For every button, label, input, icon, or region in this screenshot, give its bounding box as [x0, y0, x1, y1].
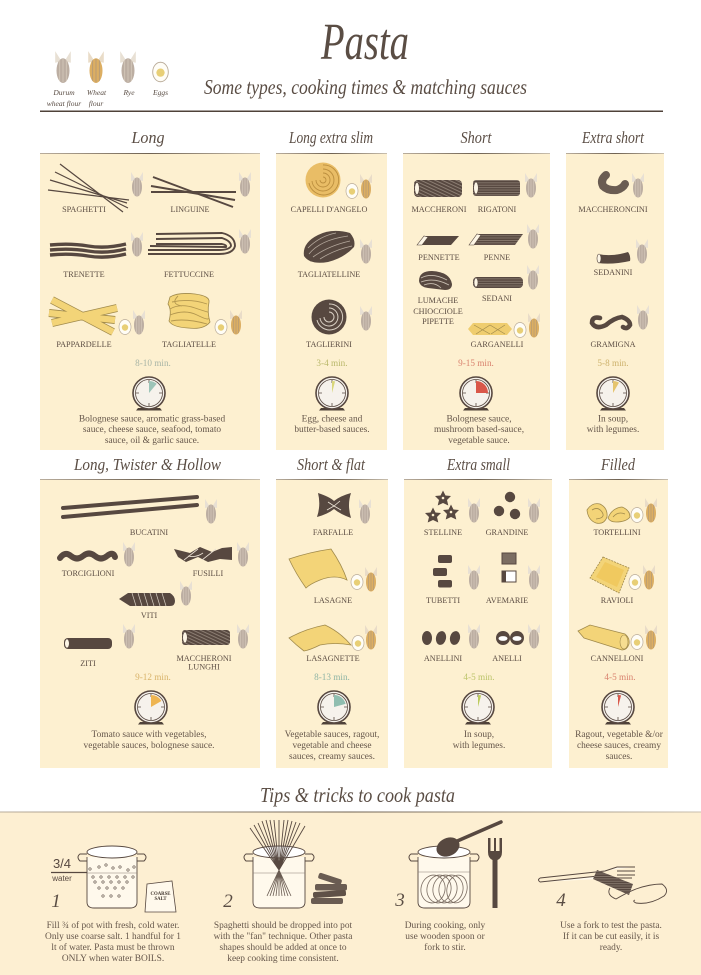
- avemarie: [486, 553, 540, 605]
- panel: Long: [40, 128, 260, 450]
- sauces: Vegetable sauces, ragout,: [285, 730, 379, 740]
- lasagne: LASAGNE: [314, 596, 352, 605]
- step text: fork to stir.: [424, 942, 466, 953]
- tagliatelline: [298, 231, 372, 279]
- fusilli: FUSILLI: [193, 569, 224, 578]
- linguine: [151, 172, 251, 214]
- pappardelle: [49, 300, 145, 349]
- timer: [602, 691, 634, 724]
- trenette: TRENETTE: [63, 270, 105, 279]
- cooking time: 4-5 min.: [463, 672, 495, 682]
- maccheroncini: [578, 173, 648, 214]
- ziti: [64, 624, 135, 668]
- number 1: 1: [51, 891, 61, 912]
- icon: salt box: SALT: [154, 897, 167, 902]
- maccheroni lunghi: LUNGHI: [188, 662, 220, 672]
- panel: Long, Twister & Hollow: Long, Twister & Hollow: [73, 455, 222, 474]
- sauces: [453, 730, 505, 751]
- capelli d'angelo: CAPELLI D'ANGELO: [291, 205, 367, 214]
- sedani: SEDANI: [482, 294, 512, 303]
- tortellini: TORTELLINI: [593, 528, 641, 537]
- icon: salt box: [145, 881, 176, 912]
- capelli d'angelo: [291, 162, 372, 214]
- tagliatelline: TAGLIATELLINE: [298, 270, 360, 279]
- sedani: [473, 265, 539, 303]
- cannelloni: CANNELLONI: [591, 654, 644, 663]
- step text: ready.: [600, 943, 622, 953]
- viti: VITI: [141, 611, 157, 620]
- sauces: sauce, oil & garlic sauce.: [105, 436, 199, 446]
- legend: ingredients key: [47, 51, 168, 108]
- title: Pasta: [320, 14, 409, 71]
- panel: Long extra slim: [276, 128, 387, 450]
- step 3: stir: [394, 822, 502, 953]
- sauces: butter-based sauces.: [294, 425, 370, 435]
- bucatini: [63, 497, 217, 537]
- subtitle: Some types, cooking times & matching sauces: [204, 75, 527, 99]
- icon: salt box: COARSE: [150, 892, 170, 897]
- legend: ingredients key: Eggs: [152, 88, 168, 97]
- lumache: [413, 271, 463, 326]
- anellini: ANELLINI: [424, 654, 462, 663]
- timer: [462, 691, 494, 724]
- panel: Filled: Filled: [600, 455, 635, 474]
- panel: Extra small: [404, 455, 552, 768]
- farfalle: [313, 493, 371, 537]
- sauces: Bolognese sauce, aromatic grass-based: [79, 414, 225, 424]
- tagliatelle: [162, 293, 242, 349]
- number 2: 2: [223, 891, 233, 912]
- sedanini: SEDANINI: [594, 268, 633, 277]
- step text: shapes should be added at once to: [219, 943, 347, 953]
- number 3: 3: [394, 890, 405, 911]
- cannelloni: [578, 625, 657, 663]
- legend: ingredients key: Durum: [52, 88, 75, 97]
- sauces: with legumes.: [453, 741, 505, 751]
- step text: Only use coarse salt. 1 handful for 1: [45, 931, 181, 942]
- cooking time: 8-10 min.: [135, 358, 171, 368]
- panel: Short: Short: [460, 128, 493, 147]
- sauces: [294, 414, 370, 435]
- step text: [560, 920, 662, 953]
- sauces: [79, 414, 225, 446]
- icon: short pasta pile: [311, 872, 347, 904]
- lumache: LUMACHE: [418, 296, 458, 305]
- tagliatelle: TAGLIATELLE: [162, 340, 216, 349]
- grandine: [486, 492, 540, 537]
- ziti: ZITI: [80, 659, 96, 668]
- timer: [133, 377, 165, 410]
- lasagne: [289, 549, 377, 605]
- fraction label: [51, 856, 87, 883]
- anelli: ANELLI: [492, 654, 522, 663]
- number 4: 4: [556, 890, 566, 911]
- maccheroni: [411, 180, 467, 214]
- step text: keep cooking time consistent.: [227, 954, 339, 964]
- grandine: GRANDINE: [486, 528, 528, 537]
- legend: ingredients key: flour: [89, 99, 103, 108]
- lasagnette: [289, 625, 377, 663]
- taglierini: TAGLIERINI: [306, 340, 352, 349]
- torciglioni: TORCIGLIONI: [62, 569, 115, 578]
- lumache: PIPETTE: [422, 317, 454, 326]
- step text: [214, 921, 353, 964]
- pennette: PENNETTE: [418, 253, 460, 262]
- step text: Use a fork to test the pasta.: [560, 920, 662, 931]
- farfalle: FARFALLE: [313, 528, 353, 537]
- panel: Long, Twister & Hollow: [40, 455, 260, 768]
- rigatoni: RIGATONI: [478, 205, 517, 214]
- tubetti: [426, 555, 480, 605]
- pennette: [417, 236, 460, 262]
- sauces: Bolognese sauce,: [446, 414, 512, 424]
- panel: Short & flat: [276, 455, 388, 768]
- anellini: [422, 624, 480, 663]
- sauces: cheese sauces, creamy: [577, 741, 661, 751]
- sauces: sauces.: [606, 752, 632, 762]
- viti: [119, 581, 192, 620]
- bucatini: BUCATINI: [130, 528, 168, 537]
- maccheroni lunghi: [176, 624, 249, 672]
- linguine: LINGUINE: [170, 205, 210, 214]
- avemarie: AVEMARIE: [486, 596, 528, 605]
- maccheroncini: MACCHERONCINI: [578, 205, 648, 214]
- pappardelle: PAPPARDELLE: [56, 340, 112, 349]
- sauces: [285, 730, 379, 762]
- icon: pot with pasta and spoon: [409, 822, 501, 908]
- step text: Spaghetti should be dropped into pot: [214, 921, 353, 931]
- sauces: vegetable sauce.: [448, 436, 510, 446]
- spaghetti: [48, 164, 143, 214]
- tortellini: [587, 498, 657, 537]
- step 4: test pasta: [538, 867, 667, 953]
- step text: lt of water. Pasta must be thrown: [51, 942, 175, 953]
- maccheroni: MACCHERONI: [411, 205, 467, 214]
- timer: [316, 377, 348, 410]
- cooking time: 4-5 min.: [604, 672, 636, 682]
- torciglioni: [60, 542, 135, 578]
- sauces: vegetable and cheese: [292, 741, 372, 751]
- sauces: [434, 414, 524, 446]
- sauces: vegetable sauces, bolognese sauce.: [84, 741, 214, 751]
- panel: Short: [403, 128, 550, 450]
- step text: Fill ¾ of pot with fresh, cold water.: [47, 920, 179, 931]
- heading: tips: Tips & tricks to cook pasta: [260, 783, 455, 807]
- sauces: sauce, cheese sauce, seafood, tomato: [83, 424, 221, 435]
- gramigna: GRAMIGNA: [590, 340, 636, 349]
- legend: ingredients key: Wheat: [87, 88, 107, 97]
- sauces: Ragout, vegetable &/or: [575, 730, 664, 740]
- taglierini: [306, 300, 372, 349]
- tubetti: TUBETTI: [426, 596, 460, 605]
- sauces: [84, 730, 214, 751]
- icon: pot with water: [78, 846, 146, 908]
- trenette: [50, 232, 143, 279]
- timer: [597, 377, 629, 410]
- step 2: fan technique: [214, 820, 353, 964]
- icon: fork and pasta: [538, 867, 667, 903]
- rigatoni: [473, 173, 537, 214]
- step text: with the "fan" technique. Other pasta: [214, 931, 353, 942]
- panel: tips and tricks: [0, 812, 701, 975]
- step text: [45, 920, 181, 964]
- maccheroni lunghi: MACCHERONI: [176, 654, 232, 663]
- step text: [405, 921, 486, 953]
- penne: [469, 224, 539, 262]
- cooking time: 8-13 min.: [314, 672, 350, 682]
- fraction label: water: [51, 874, 72, 883]
- gramigna: [590, 305, 649, 349]
- icon: pot with spaghetti fan: [244, 820, 314, 908]
- step text: During cooking, only: [405, 921, 486, 931]
- sauces: In soup,: [598, 414, 628, 424]
- sedanini: [594, 239, 648, 277]
- panel: Extra small: Extra small: [446, 455, 510, 474]
- ravioli: [590, 557, 655, 605]
- timer: [460, 377, 492, 410]
- sauces: Egg, cheese and: [302, 414, 363, 424]
- step text: use wooden spoon or: [405, 932, 486, 942]
- penne: PENNE: [484, 253, 510, 262]
- fettuccine: [148, 229, 251, 279]
- fettuccine: FETTUCCINE: [164, 270, 214, 279]
- panel: Extra short: Extra short: [581, 128, 645, 147]
- sauces: [587, 414, 639, 435]
- panel: Short & flat: Short & flat: [297, 455, 366, 474]
- lumache: CHIOCCIOLE: [413, 307, 463, 316]
- cooking time: 5-8 min.: [597, 358, 629, 368]
- sauces: In soup,: [464, 730, 494, 740]
- sauces: with legumes.: [587, 425, 639, 435]
- panel: Extra short: [566, 128, 664, 450]
- sauces: mushroom based-sauce,: [434, 425, 524, 435]
- timer: [135, 691, 167, 724]
- panel: Filled: [569, 455, 668, 768]
- garganelli: [468, 313, 540, 349]
- ravioli: RAVIOLI: [601, 596, 634, 605]
- cooking time: 3-4 min.: [316, 358, 348, 368]
- stelline: [424, 490, 480, 537]
- garganelli: GARGANELLI: [471, 340, 524, 349]
- anelli: [492, 624, 540, 663]
- step text: If it can be cut easily, it is: [563, 931, 659, 942]
- fraction label: 3/4: [53, 856, 71, 871]
- sauces: [575, 730, 664, 762]
- legend: ingredients key: wheat flour: [47, 99, 81, 108]
- timer: [318, 691, 350, 724]
- sauces: Tomato sauce with vegetables,: [92, 730, 206, 740]
- spaghetti: SPAGHETTI: [62, 205, 106, 214]
- cooking time: 9-12 min.: [135, 672, 171, 682]
- step 1: fill pot: [45, 846, 181, 964]
- lasagnette: LASAGNETTE: [306, 654, 360, 663]
- cooking time: 9-15 min.: [458, 358, 494, 368]
- sauces: sauces, creamy sauces.: [289, 752, 375, 762]
- panel: Long: Long: [131, 128, 164, 147]
- panel: Long extra slim: Long extra slim: [288, 128, 373, 147]
- fusilli: [174, 542, 249, 578]
- stelline: STELLINE: [424, 528, 462, 537]
- step text: ONLY when water BOILS.: [62, 954, 164, 964]
- legend: ingredients key: Rye: [122, 88, 135, 97]
- icon: fork: [488, 838, 502, 908]
